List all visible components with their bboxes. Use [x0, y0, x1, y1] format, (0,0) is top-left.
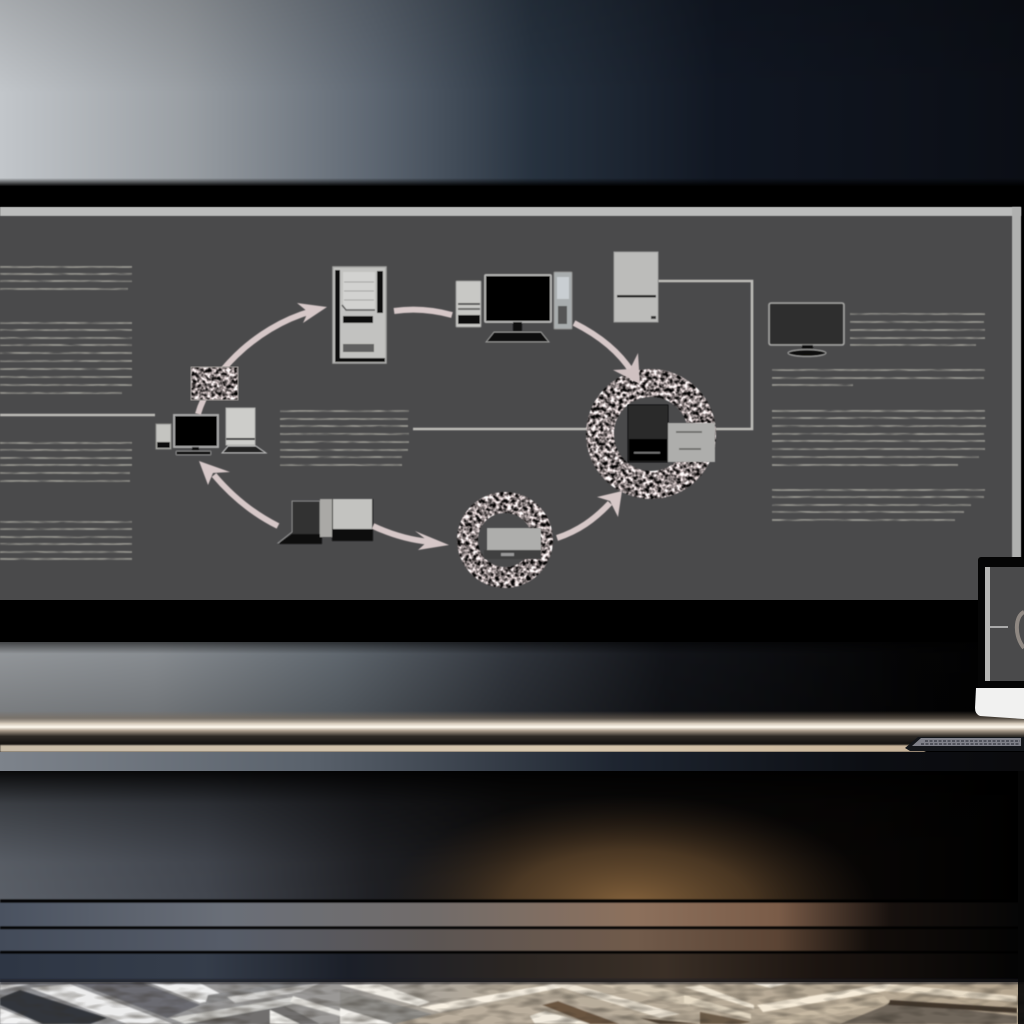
- icon: left workstation group: [156, 408, 266, 455]
- upper wall gradient: [0, 0, 1024, 207]
- ring: large speckled ring with device: [600, 383, 715, 485]
- shelf: [0, 711, 1024, 771]
- lower wall and band: [0, 642, 1024, 726]
- icon: small speckled card: [191, 367, 238, 400]
- arrows: flow cycle: [198, 303, 640, 550]
- icon: desktop computer with two towers: [456, 272, 572, 342]
- icon: tower server: [333, 267, 386, 363]
- icon: monitor: [769, 303, 844, 356]
- herringbone floor: [0, 979, 1024, 1024]
- right edge post: [1018, 771, 1024, 1024]
- connector lines: [0, 281, 752, 429]
- icon: flat box unit: [614, 252, 658, 322]
- black band behind the panel: [0, 600, 1024, 642]
- arrow: desktop to large ring: [574, 323, 640, 384]
- wall panel: [0, 186, 1024, 600]
- icon: device inside small ring: [484, 528, 541, 559]
- keyboard: [905, 737, 1024, 751]
- arrow: laptop to small ring: [373, 526, 449, 550]
- text block: right column: [772, 314, 986, 520]
- icon: laptop-style unit: [278, 499, 373, 544]
- arrow: tower to desktop: [394, 310, 452, 315]
- arrow: laptop to left node: [199, 461, 278, 526]
- lower wall with warm glow: [0, 771, 1024, 902]
- laptop base: [975, 688, 1024, 719]
- text block: left column: [0, 267, 132, 559]
- text block: centre: [280, 411, 409, 465]
- laptop at right edge: [905, 557, 1024, 751]
- ring: small speckled ring with device: [468, 502, 542, 578]
- icon: device inside large ring: [628, 405, 715, 462]
- wainscot stripes: [0, 900, 1024, 982]
- arrow: small ring to large ring: [557, 491, 622, 538]
- arrow: left node to tower: [198, 303, 327, 414]
